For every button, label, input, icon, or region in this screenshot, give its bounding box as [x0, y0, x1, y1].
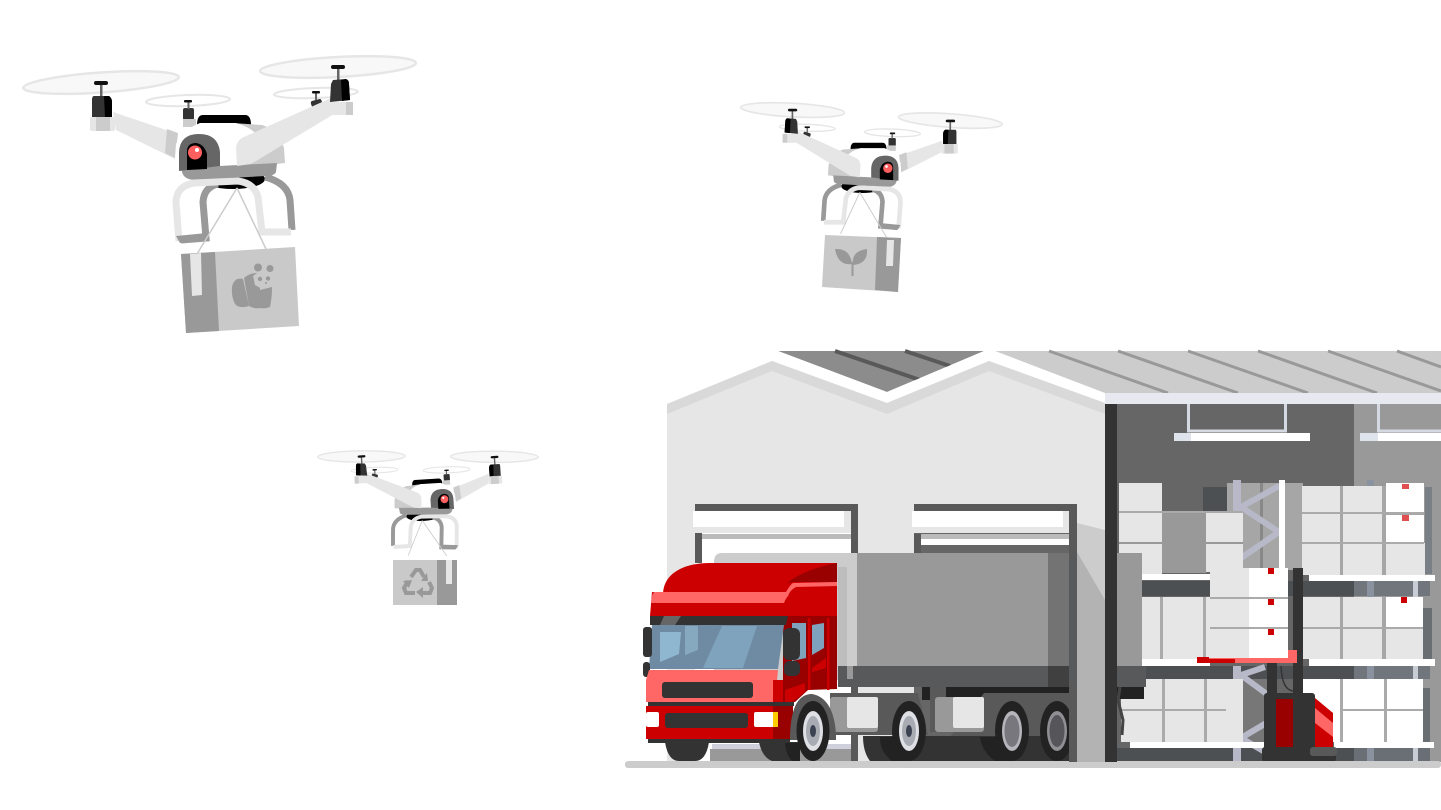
drone with recycling parcel: [317, 437, 544, 605]
icon: sprout: [835, 249, 867, 276]
sun visor: [650, 616, 788, 625]
stacked boxes bottom row: [1121, 679, 1423, 742]
door column overlay: [1069, 540, 1117, 762]
wheel 3: [995, 701, 1029, 761]
truck: [643, 540, 1146, 762]
ceiling lamp 1: [1174, 404, 1310, 441]
wall: [667, 361, 1105, 762]
warehouse interior: [1105, 393, 1441, 762]
loading door 2: [912, 504, 1077, 762]
icon: panda: [232, 264, 274, 308]
shelves: [1130, 574, 1435, 748]
drone with panda parcel: [23, 53, 416, 333]
cab side panel: [783, 616, 837, 702]
stacked boxes top row: [1119, 483, 1425, 575]
wheels rear: [863, 701, 1074, 761]
forklift: [1197, 568, 1337, 762]
fuel tank 2: [935, 697, 984, 732]
forklift load: [1210, 568, 1288, 658]
mirrors: [783, 628, 800, 660]
cab: [643, 563, 837, 761]
ceiling lamp 2: [1360, 404, 1441, 441]
wheel 4: [1040, 701, 1074, 761]
loading door 1: [693, 504, 858, 762]
front roof: [995, 351, 1441, 394]
windshield: [649, 625, 784, 669]
floor: [625, 761, 1441, 768]
icon: recycling arrows: [404, 570, 432, 593]
back roof: [778, 351, 984, 392]
parcel box with recycling logo: [393, 560, 457, 605]
drone with plant parcel: [740, 100, 1003, 292]
parcel box with leaf logo: [822, 235, 901, 292]
cab front tyres: [665, 742, 800, 761]
wheel 2: [892, 701, 926, 761]
chassis and rear fenders: [830, 687, 1069, 737]
cab front panel: [646, 670, 778, 702]
parcel box with panda logo: [181, 247, 299, 333]
dock wedge: [1077, 523, 1105, 762]
stacked boxes middle row: [1142, 597, 1423, 659]
front fender and wheel: [785, 694, 836, 761]
bumper: [648, 702, 794, 706]
roof: [650, 563, 837, 616]
side windows: [792, 623, 806, 661]
trailer: [714, 553, 1146, 735]
fuel tank 1: [830, 697, 878, 732]
warehouse: [625, 351, 1441, 768]
rack frames: [1117, 480, 1432, 762]
white roof edge: [667, 351, 1105, 404]
